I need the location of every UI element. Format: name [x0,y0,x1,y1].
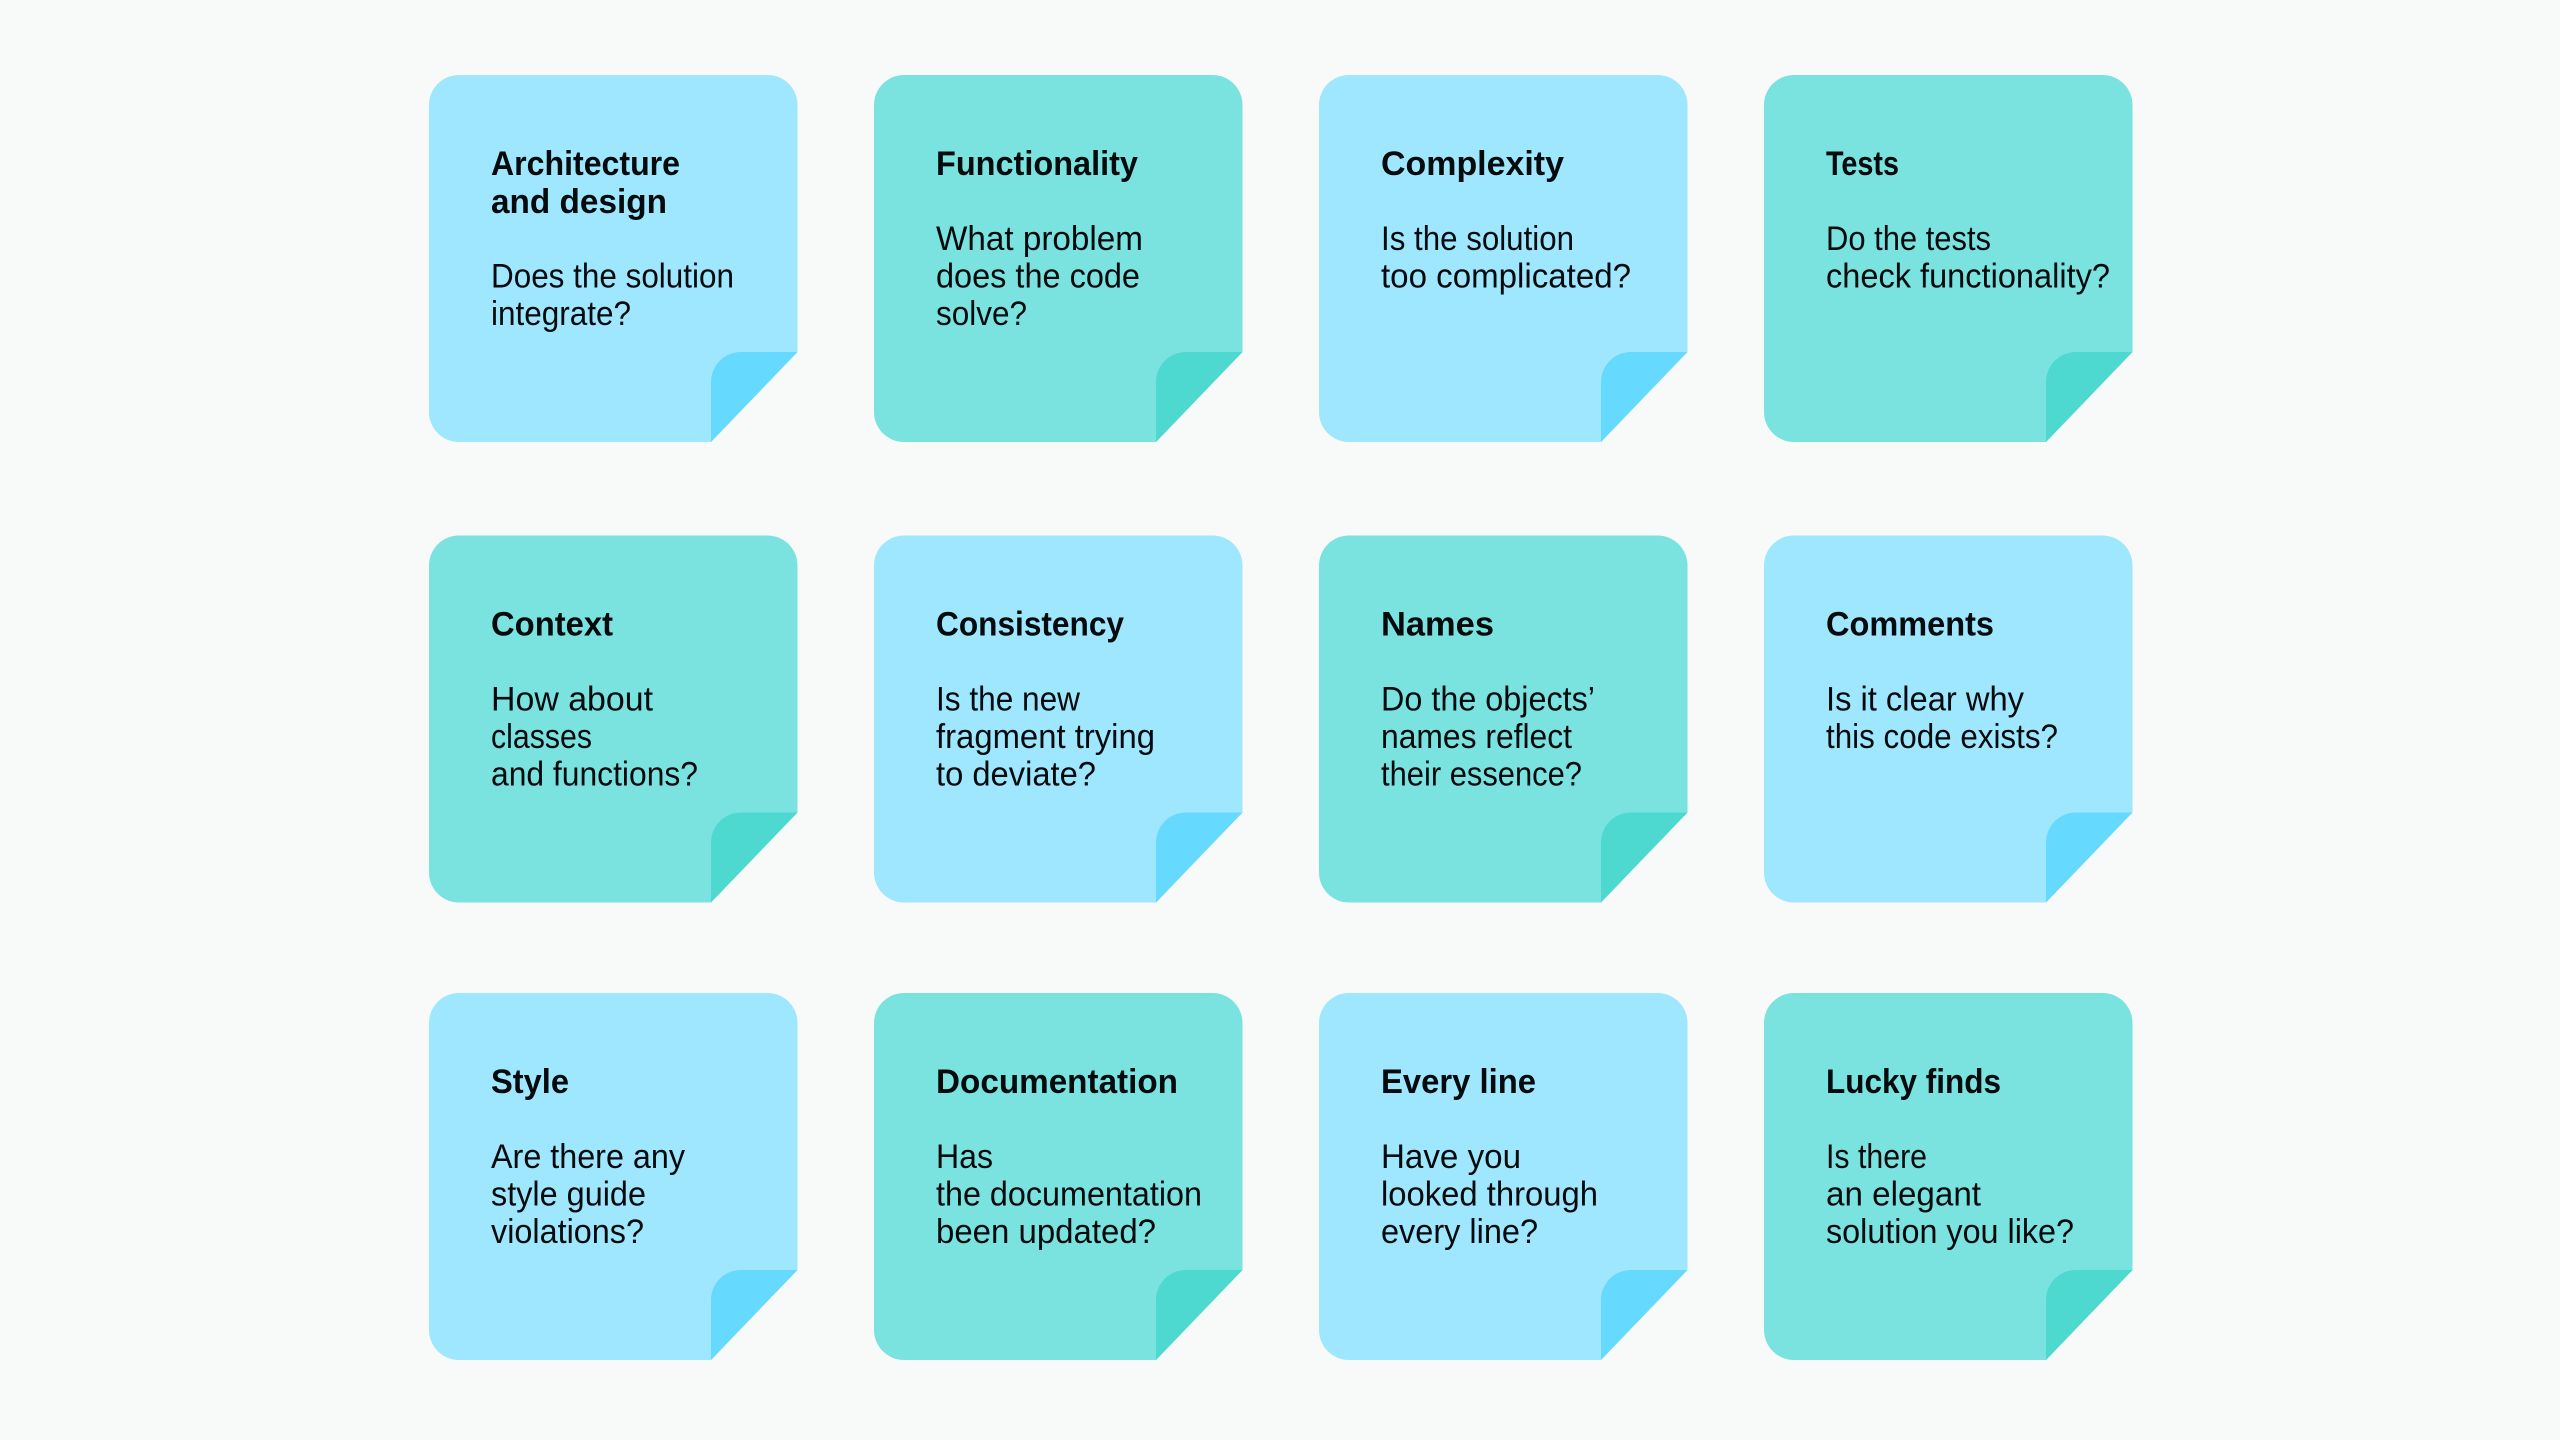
card: Documentation [874,993,1242,1360]
body text: Is it clear why [1826,680,2024,718]
heading: and design [491,183,667,221]
fold corner [2046,352,2132,442]
body text [1826,220,2110,296]
fold corner [1601,1270,1688,1360]
body text [936,680,1155,794]
fold corner [1156,1270,1242,1360]
body text [1381,680,1595,794]
body text: style guide [491,1176,646,1214]
body text: check functionality? [1826,258,2110,296]
body text: Do the tests [1826,220,1991,258]
heading: Functionality [936,145,1138,183]
heading: Every line [1381,1063,1536,1101]
body text: too complicated? [1381,258,1631,296]
body text: this code exists? [1826,718,2058,756]
body text [936,1138,1202,1251]
body text [1826,1138,2074,1251]
body text: Is there [1826,1138,1927,1176]
body text: What problem [936,220,1143,258]
card: Complexity [1319,75,1688,442]
body text: solution you like? [1826,1213,2074,1251]
card: Functionality [874,75,1242,442]
fold corner [1601,812,1688,902]
body text [491,680,698,794]
body text: integrate? [491,295,631,333]
body text: does the code [936,258,1140,296]
card: Comments [1764,536,2132,902]
card: Style [429,993,798,1360]
fold corner [2046,1270,2132,1360]
body text: Has [936,1138,993,1176]
fold corner [1156,812,1242,902]
body text [1381,220,1631,296]
body text: Does the solution [491,258,734,296]
body text: Have you [1381,1138,1521,1176]
body text: Are there any [491,1138,685,1176]
fold corner [2046,812,2132,902]
body text: the documentation [936,1176,1202,1214]
body text: their essence? [1381,756,1582,794]
card: Every line [1319,993,1688,1360]
body text: every line? [1381,1213,1538,1251]
body text: names reflect [1381,718,1573,756]
heading: Documentation [936,1063,1178,1101]
fold corner [1601,352,1688,442]
body text: violations? [491,1213,644,1251]
body text [491,258,734,333]
body text: looked through [1381,1176,1598,1214]
body text: Do the objects’ [1381,680,1595,718]
heading: Complexity [1381,145,1564,183]
card: Lucky finds [1764,993,2132,1360]
heading [491,145,680,221]
heading: Comments [1826,606,1994,644]
body text: to deviate? [936,756,1096,794]
body text [1381,1138,1598,1251]
body text: and functions? [491,756,698,794]
body text: fragment trying [936,718,1155,756]
body text: Is the solution [1381,220,1574,258]
card: Names [1319,536,1688,902]
card: Consistency [874,536,1242,902]
fold corner [711,1270,798,1360]
fold corner [1156,352,1242,442]
heading: Architecture [491,145,680,183]
body text: been updated? [936,1213,1156,1251]
heading: Consistency [936,606,1124,644]
fold corner [711,352,798,442]
body text [491,1138,685,1251]
body text: solve? [936,295,1027,333]
heading: Lucky finds [1826,1063,2001,1101]
heading: Tests [1826,145,1899,183]
body text [1826,680,2058,756]
body text: an elegant [1826,1176,1982,1214]
fold corner [711,812,798,902]
card: Context [429,536,798,902]
body text: classes [491,718,592,756]
heading: Context [491,606,613,644]
card: Architecture and design [429,75,798,442]
heading: Style [491,1063,569,1101]
heading: Names [1381,606,1494,644]
card: Tests [1764,75,2132,442]
body text: Is the new [936,680,1080,718]
body text: How about [491,680,654,718]
body text [936,220,1143,333]
